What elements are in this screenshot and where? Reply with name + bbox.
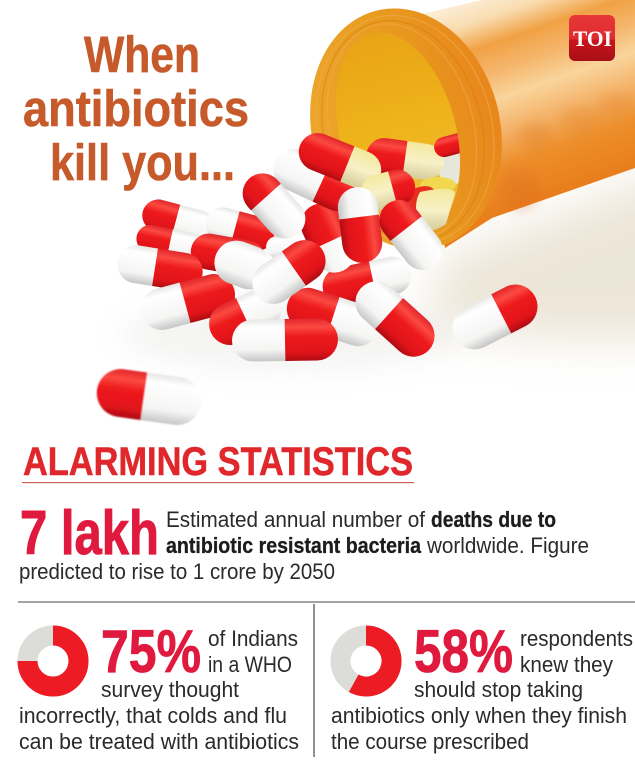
bottle body [395, 0, 635, 248]
pile shadow [120, 300, 460, 370]
stat: 7 lakh [19, 499, 589, 584]
title: kill you... [50, 134, 235, 191]
panel: 58%: the course prescribed [331, 729, 529, 754]
panel: 58%: 58% [414, 618, 513, 685]
TOI badge: TOI [573, 26, 612, 51]
stat: 7 lakh: antibiotic resistant bacteria [166, 533, 422, 558]
TOI badge [569, 15, 615, 61]
panel: 75%: can be treated with antibiotics [19, 729, 299, 754]
donut chart: 58% [340, 635, 392, 686]
panel: 75%: in a WHO [208, 652, 292, 677]
stat: 7 lakh: 7 lakh [20, 499, 159, 568]
panel: 75% [19, 618, 299, 754]
stat: 7 lakh: Estimated annual number of [166, 507, 426, 532]
panel: 58% [331, 618, 633, 754]
panel: 58%: should stop taking [414, 677, 583, 702]
panel: 58%: knew they [520, 652, 613, 677]
panel: 75%: incorrectly, that colds and flu [19, 703, 287, 728]
bottle interior [315, 18, 481, 248]
stat: 7 lakh: worldwide. Figure [426, 533, 589, 558]
capsule: front single [94, 366, 204, 428]
capsule pile [115, 127, 455, 365]
title [23, 26, 249, 191]
panel: 75%: survey thought [101, 677, 239, 702]
bottle shadow [430, 150, 635, 341]
panel: 75%: 75% [101, 618, 201, 685]
title: antibiotics [23, 80, 249, 137]
bottle rim [285, 0, 527, 270]
panel: 75%: of Indians [208, 626, 298, 651]
stat: 7 lakh: deaths due to [431, 507, 556, 532]
capsule: right single [445, 277, 545, 357]
title: When [84, 26, 200, 83]
pill bottle [310, 0, 635, 248]
panel: 58%: antibiotics only when they finish [331, 703, 627, 728]
heading: alarming statistics: ALARMING STATISTICS [23, 440, 413, 484]
stat: 7 lakh: predicted to rise to 1 crore by 2050 [19, 559, 335, 584]
pills inside bottle [367, 133, 460, 209]
donut chart: 75% [28, 636, 78, 686]
